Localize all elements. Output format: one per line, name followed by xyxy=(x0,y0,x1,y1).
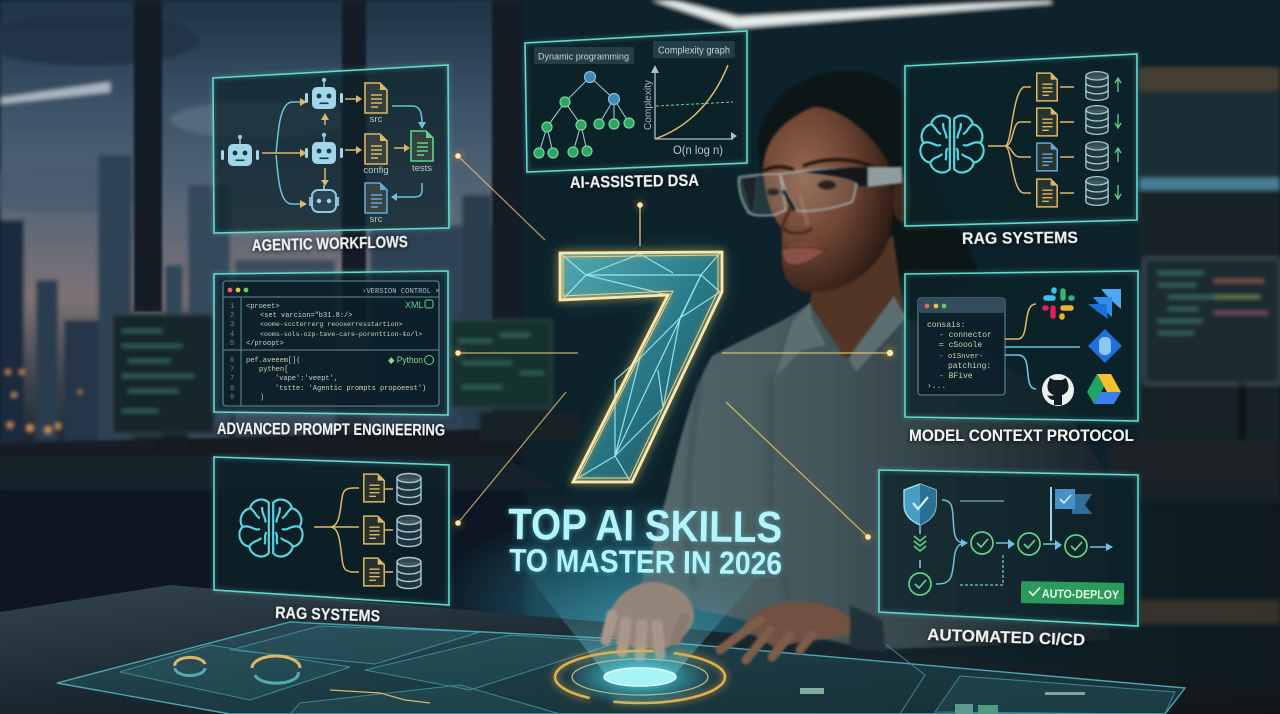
heading tags xyxy=(534,41,735,64)
shirt folds xyxy=(687,375,790,600)
label: agentic workflows: AGENTIC WORKFLOWS xyxy=(252,232,408,255)
icon: documents and databases xyxy=(1037,72,1108,207)
code window: 9 xyxy=(230,394,234,402)
icon: github xyxy=(1042,374,1074,406)
code window: 1 xyxy=(230,303,234,311)
code window: 5 xyxy=(230,340,234,348)
workflow arrows xyxy=(262,95,426,208)
code window: - connector xyxy=(939,331,992,340)
code window: 2 xyxy=(230,312,234,320)
branches xyxy=(314,488,393,572)
code window: consais: xyxy=(927,321,965,330)
label: model context protocol: MODEL CONTEXT PROTOCOL xyxy=(909,426,1134,445)
title line 1: TOP AI SKILLS xyxy=(508,500,782,552)
city window view xyxy=(0,0,520,450)
code window: 'tstte: 'Agentic prompts propoeest') xyxy=(275,385,426,393)
code window: 6 xyxy=(230,357,234,365)
title line 2: TO MASTER IN 2026 xyxy=(509,542,782,581)
code window: 8 xyxy=(230,385,234,393)
icon: robots xyxy=(221,78,343,212)
hands xyxy=(606,582,886,660)
code window: ›... xyxy=(927,382,946,391)
heading tags: Dynamic programming xyxy=(538,52,629,62)
code window: 7 xyxy=(230,366,234,374)
connectors xyxy=(1005,304,1080,389)
hair back xyxy=(758,71,980,292)
panel: model context protocol xyxy=(905,271,1138,421)
branches xyxy=(988,87,1074,193)
panel: advanced prompt engineering xyxy=(214,271,448,415)
code window: 7 xyxy=(230,375,234,383)
code window: = cSooole xyxy=(939,341,982,350)
file labels: src xyxy=(370,114,383,125)
glowing touch point xyxy=(555,647,725,707)
file labels xyxy=(363,114,432,225)
code window: patching: xyxy=(948,362,991,371)
connector lines xyxy=(455,153,893,540)
code window: 3 xyxy=(230,321,234,329)
code window xyxy=(918,298,1005,395)
label: advanced prompt engineering: ADVANCED PROMPT ENGINEERING xyxy=(217,419,445,440)
woman with smart glasses xyxy=(640,71,1110,650)
status checks xyxy=(909,532,1087,595)
panel: rag systems right xyxy=(905,54,1137,226)
panel: rag systems left xyxy=(214,457,449,605)
tree diagram xyxy=(534,72,634,158)
complexity chart: O(n log n) xyxy=(673,143,723,157)
complexity chart xyxy=(643,65,737,157)
table readout bars xyxy=(330,688,1085,714)
code window: <proeet> xyxy=(246,303,280,311)
window frames xyxy=(0,0,524,470)
neck xyxy=(810,235,905,358)
shirt xyxy=(640,303,1110,650)
auto-deploy badge xyxy=(1021,581,1124,605)
left hand xyxy=(606,582,694,656)
label: rag systems left: RAG SYSTEMS xyxy=(275,603,380,626)
code window: - BFive xyxy=(939,372,973,381)
icon: confluence xyxy=(1088,329,1122,363)
icon: google drive xyxy=(1087,374,1121,404)
main title xyxy=(508,500,782,581)
smart glasses xyxy=(739,167,902,216)
heading tags: Complexity graph xyxy=(658,46,730,56)
code window: 'vape':'veept', xyxy=(275,375,338,383)
icon: shield xyxy=(904,484,936,525)
file labels: config xyxy=(363,165,389,176)
collar xyxy=(776,296,906,376)
code window: pef.aveeem[]( xyxy=(246,357,301,365)
hologram table display xyxy=(57,622,1185,714)
icon: brain xyxy=(239,500,303,556)
code window: ◆ Python xyxy=(388,355,423,365)
code window: ) xyxy=(260,394,264,402)
auto-deploy badge: AUTO-DEPLOY xyxy=(1042,586,1119,602)
foreground desk xyxy=(0,585,1280,714)
ear xyxy=(892,174,912,222)
teal haze behind title xyxy=(430,500,850,714)
complexity chart: Complexity xyxy=(643,80,654,130)
label: automated ci/cd: AUTOMATED CI/CD xyxy=(927,625,1085,650)
code window: ›VERSION CONTROL × xyxy=(362,288,440,296)
code window: </proopt> xyxy=(246,340,284,348)
light beam from table xyxy=(500,540,790,680)
file labels: src xyxy=(370,214,383,225)
large number 7 xyxy=(560,252,722,482)
code window xyxy=(223,281,440,406)
dashboard rings xyxy=(175,656,300,683)
panel: ai-assisted dsa xyxy=(525,31,747,172)
label: ai-assisted dsa: AI-ASSISTED DSA xyxy=(570,171,699,192)
panel: automated ci/cd xyxy=(879,470,1138,626)
icon: documents and databases xyxy=(364,474,421,588)
code window: 4 xyxy=(230,331,234,339)
right hand with cuff xyxy=(720,602,886,660)
panel: agentic workflows xyxy=(213,65,449,233)
code window: <oome-sccterrerg reooxerresstartion> xyxy=(260,321,402,328)
code window: pythen[ xyxy=(259,366,288,374)
label: rag systems right: RAG SYSTEMS xyxy=(962,228,1078,248)
background desk and left monitors xyxy=(0,314,580,630)
code window: XML xyxy=(405,300,424,310)
back office with lights and monitors xyxy=(524,0,1280,624)
eyebrows, nose and lips xyxy=(762,160,873,264)
icon: brain xyxy=(920,116,984,172)
code window: - o1Snver- xyxy=(939,353,983,361)
code window: <set varcion="b31.8:/> xyxy=(260,312,352,320)
file labels: tests xyxy=(412,163,432,174)
icon: jira xyxy=(1088,289,1121,319)
icon: slack xyxy=(1045,290,1072,317)
icon: flag xyxy=(1051,487,1092,541)
pipeline flow xyxy=(914,500,1113,585)
face xyxy=(763,107,893,292)
code window: <ooms-sols-ozp-tave-care-porenttion-ŧo/l> xyxy=(260,331,422,338)
icon: documents xyxy=(365,83,433,213)
direction arrows xyxy=(1115,78,1121,199)
